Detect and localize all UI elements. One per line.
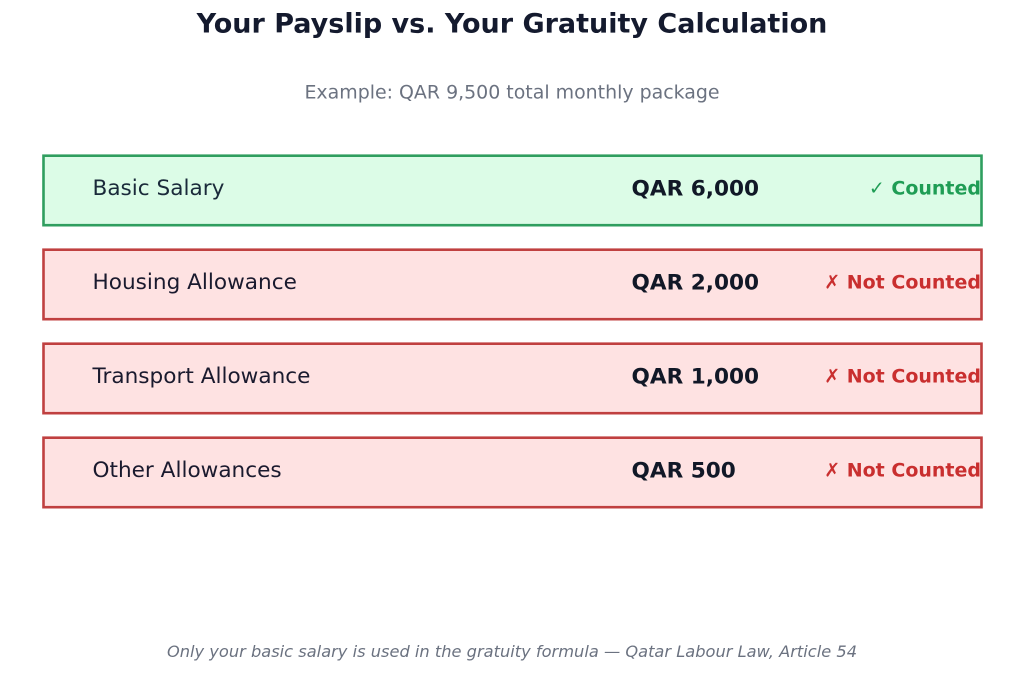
title: Your Payslip vs. Your Gratuity Calculation — [196, 8, 827, 40]
row: other allowances — [44, 438, 982, 507]
footnote: Only your basic salary is used in the gratuity formula — Qatar Labour Law, Article 54 — [167, 642, 857, 661]
row: transport allowance: ✗ Not Counted — [824, 366, 981, 388]
row: basic salary — [44, 156, 982, 225]
row: housing allowance — [44, 250, 982, 319]
row: housing allowance: ✗ Not Counted — [824, 272, 981, 294]
row: housing allowance: QAR 2,000 — [632, 270, 759, 296]
row: basic salary: ✓ Counted — [869, 178, 981, 200]
row: other allowances: Other Allowances — [92, 458, 282, 483]
row: basic salary: QAR 6,000 — [632, 176, 759, 202]
row: transport allowance: Transport Allowance — [92, 364, 310, 389]
row: transport allowance — [44, 344, 982, 413]
row: basic salary: Basic Salary — [92, 176, 225, 201]
subtitle: Example: QAR 9,500 total monthly package — [304, 82, 720, 104]
row: other allowances: QAR 500 — [632, 458, 736, 484]
row: other allowances: ✗ Not Counted — [824, 460, 981, 482]
row: housing allowance: Housing Allowance — [92, 270, 297, 295]
row: transport allowance: QAR 1,000 — [632, 364, 759, 390]
